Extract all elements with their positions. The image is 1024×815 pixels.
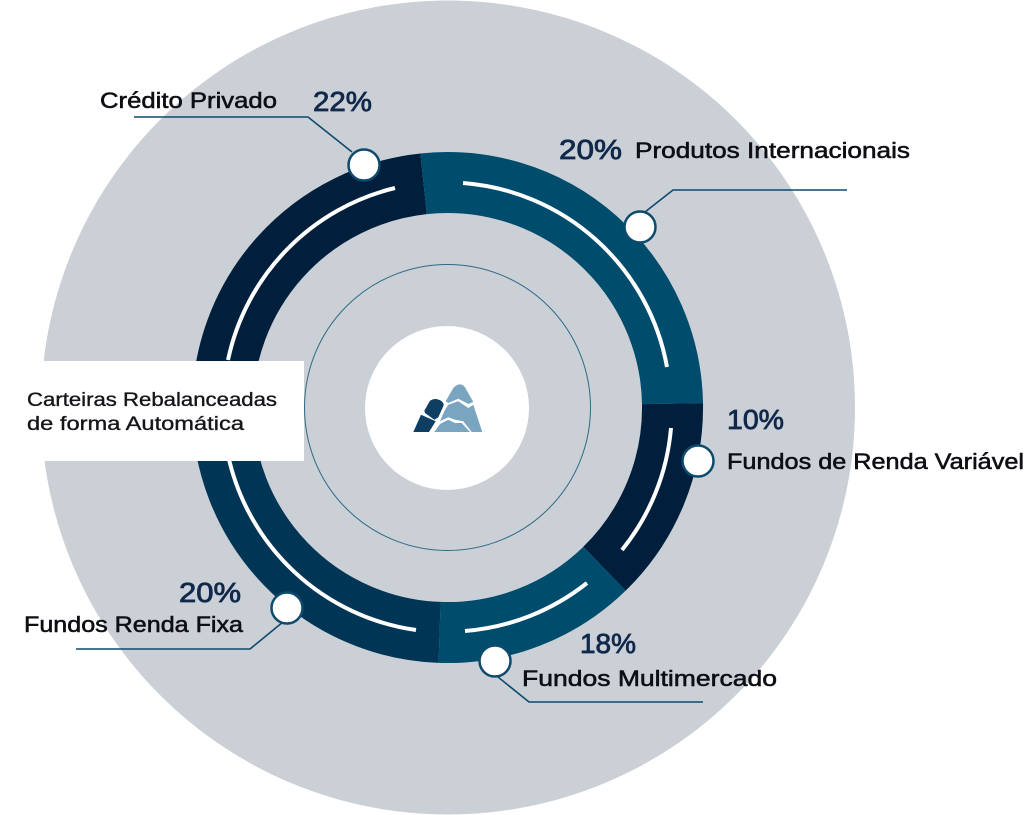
label: Produtos Internacionais: Produtos Internacionais <box>635 138 910 163</box>
label: Fundos de Renda Variável <box>727 404 1024 474</box>
segment: Fundos Renda Fixa 20% <box>222 408 440 632</box>
background grey disc <box>41 0 855 814</box>
centre white circle <box>365 326 529 490</box>
donut chart <box>222 183 673 633</box>
callout text <box>27 390 277 435</box>
leader lines <box>76 117 847 702</box>
segment: Fundos de Renda Variável 10% <box>604 404 673 569</box>
marker dots <box>272 150 714 676</box>
callout text: de forma Automática <box>27 414 245 435</box>
label: Crédito Privado <box>100 86 372 117</box>
label: Fundos Renda Fixa: Fundos Renda Fixa <box>24 612 244 637</box>
label: Fundos Renda Fixa: 20% <box>179 577 241 608</box>
callout text: Carteiras Rebalanceadas <box>27 390 277 411</box>
label: Crédito Privado: 22% <box>313 86 372 117</box>
segment: Crédito Privado 22% <box>222 184 424 408</box>
label: Fundos Multimercado: 18% <box>580 628 636 659</box>
segment: Produtos Internacionais 20% <box>424 183 672 404</box>
label: Fundos Multimercado: Fundos Multimercado <box>522 666 777 691</box>
label: Produtos Internacionais <box>559 134 910 165</box>
segment: Fundos Multimercado 18% <box>440 569 604 633</box>
label: Fundos Multimercado <box>522 628 777 691</box>
label: Fundos de Renda Variável: 10% <box>727 404 784 435</box>
icon: mountain logo <box>413 384 482 432</box>
label: Produtos Internacionais: 20% <box>559 134 622 165</box>
panel: white callout <box>0 361 304 461</box>
label: Crédito Privado: Crédito Privado <box>100 88 277 113</box>
label: Fundos Renda Fixa <box>24 577 244 637</box>
inner thin ring <box>304 264 590 550</box>
white inner arcs <box>228 183 671 631</box>
label: Fundos de Renda Variável: Fundos de Renda Variável <box>727 449 1024 474</box>
